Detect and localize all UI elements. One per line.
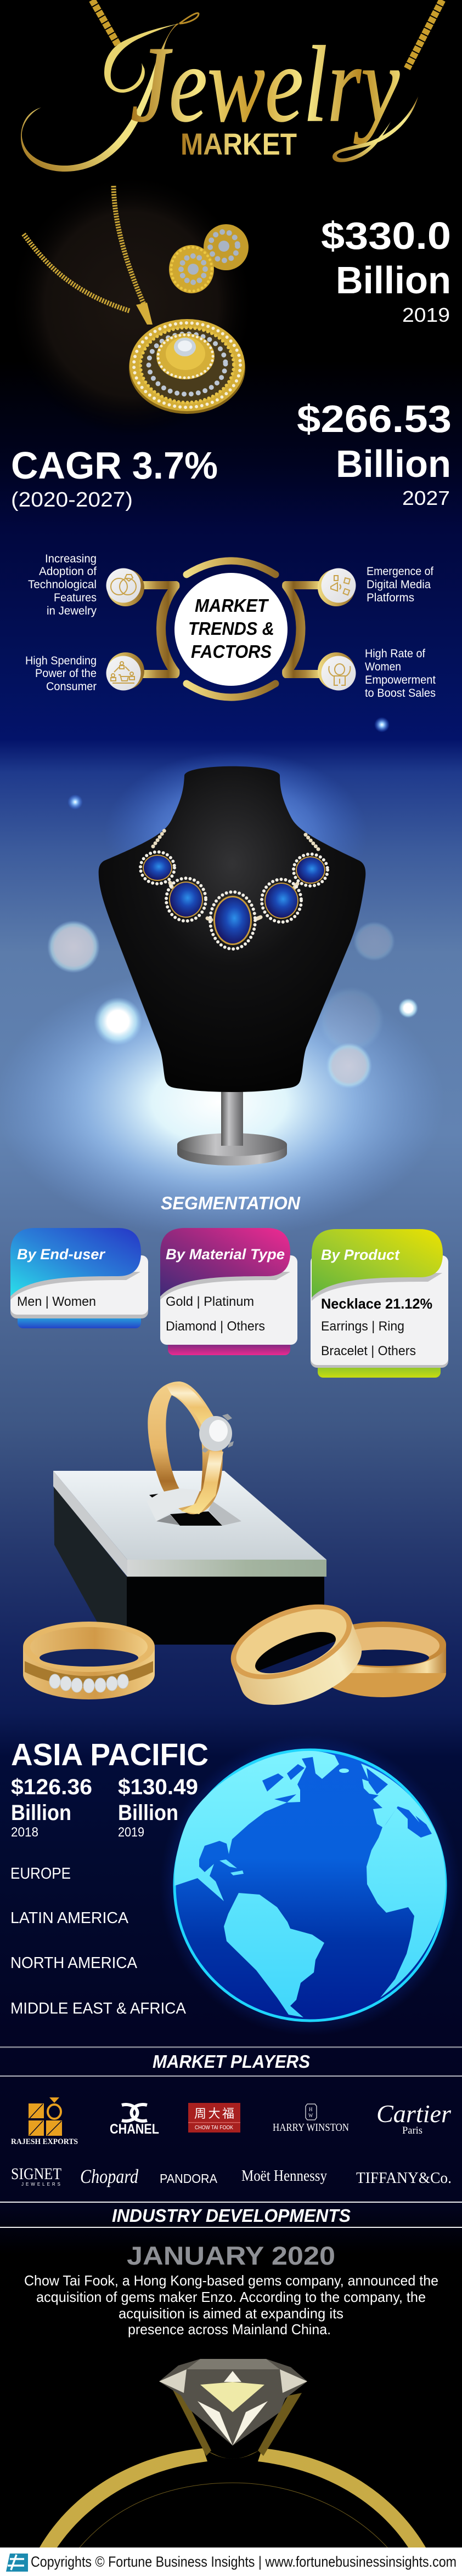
globe: [159, 1735, 461, 2036]
card: by end-user: By End-user: [17, 1246, 105, 1263]
card: by end-user: [10, 1228, 148, 1328]
bust body: [99, 766, 365, 1092]
lid front: [127, 1560, 326, 1577]
illustration: bust with sapphire necklace: [99, 766, 365, 1165]
logo: Chopard: Chopard: [80, 2165, 139, 2187]
europe and africa: [361, 1764, 446, 1998]
logo: Rajesh Exports: [11, 2097, 78, 2146]
stat: $330.0 Billion 2019: 2019: [402, 304, 450, 326]
logo: Tiffany: TIFFANY&Co.: [356, 2170, 452, 2187]
logo: Harry Winston: H: [309, 2107, 313, 2112]
ring slot: [149, 1493, 241, 1526]
card: by product: Earrings | Ring: [321, 1319, 404, 1334]
illustration: ring on display box: [53, 1381, 326, 1645]
card: by end-user: Men | Women: [17, 1294, 96, 1309]
front ring: [221, 1589, 372, 1720]
logo: Harry Winston: HARRY WINSTON: [273, 2122, 349, 2134]
pendant: [129, 319, 245, 414]
subtitle MARKET: MARKET: [181, 127, 297, 161]
script J stem swash: [21, 24, 179, 172]
title: Jewelry Market: [21, 0, 442, 172]
logo: Pandora: PANDORA: [160, 2171, 218, 2186]
list: other regions: EUROPE: [10, 1865, 71, 1883]
label: women empowerment: Women: [365, 661, 401, 673]
label: technological features: Technological: [28, 578, 97, 591]
illustration: pair of gold rings: [221, 1589, 446, 1720]
north america: [174, 1751, 339, 1901]
gem: [262, 879, 301, 922]
earring front: [169, 245, 214, 293]
top arc: [187, 561, 275, 575]
stat: $330.0 Billion 2019: [321, 214, 451, 326]
label: women empowerment: High Rate of: [365, 647, 425, 660]
stat: $266.53 Billion 2027: 2027: [402, 487, 450, 509]
label: digital media: Emergence of: [367, 565, 433, 578]
list: other regions: LATIN AMERICA: [10, 1909, 129, 1927]
panel: asia pacific regional stats: Billion: [11, 1801, 71, 1825]
logo: Chow Tai Fook: CHOW TAI FOOK: [195, 2125, 233, 2131]
script y tail swash: [333, 96, 418, 162]
logo: Rajesh Exports: RAJESH EXPORTS: [11, 2137, 78, 2146]
logo: Chanel: CHANEL: [110, 2122, 159, 2137]
baltic and mediterranean seas: [367, 1768, 432, 1838]
ring front band: [181, 1451, 223, 1514]
footer: [0, 2547, 462, 2576]
stat: $330.0 Billion 2019: $330.0: [321, 214, 451, 257]
right bracket: [282, 581, 320, 678]
list: other regions: [10, 1865, 187, 2017]
south america: [224, 1893, 324, 2017]
logo: Signet: JEWELERS: [21, 2182, 60, 2187]
card: by product: [311, 1229, 448, 1378]
centre title: FACTORS: [191, 641, 272, 662]
logo: Cartier: Cartier: [376, 2100, 452, 2128]
label: spending power: Consumer: [46, 680, 97, 693]
list: other regions: NORTH AMERICA: [10, 1954, 138, 1972]
heading: segmentation: SEGMENTATION: [161, 1193, 301, 1213]
heading: market players: MARKET PLAYERS: [153, 2051, 310, 2072]
panel: asia pacific regional stats: ASIA PACIFIC: [11, 1737, 209, 1772]
label: digital media: Digital Media: [367, 578, 431, 591]
stand pole: [221, 1088, 243, 1146]
logo: Fortune Business Insights: [6, 2554, 28, 2572]
panel: asia pacific regional stats: $126.36: [11, 1775, 92, 1799]
hudson bay: [262, 1764, 305, 1802]
bottom arc: [187, 684, 275, 697]
card: by material type: Gold | Platinum: [166, 1294, 254, 1309]
panel: asia pacific regional stats: $130.49: [118, 1775, 198, 1799]
photo: gold pendant necklace and earrings: [8, 173, 255, 436]
label: technological features: Adoption of: [39, 565, 97, 578]
ring band: [148, 1381, 223, 1514]
label: women empowerment: Empowerment: [365, 674, 436, 686]
panel: market trends and factors: [25, 553, 436, 700]
card: by product: Necklace 21.12%: [321, 1295, 432, 1312]
gem: [166, 878, 206, 921]
heading: industry developments: INDUSTRY DEVELOPMENTS: [112, 2205, 351, 2226]
iceland: [339, 1768, 349, 1773]
panel: asia pacific regional stats: Billion: [118, 1801, 178, 1825]
stat: $266.53 Billion 2027: [297, 397, 452, 509]
card: by material type: Diamond | Others: [166, 1319, 265, 1334]
label: technological features: Features: [54, 592, 97, 604]
white cushion arch: [147, 1488, 200, 1521]
stat: CAGR: [11, 444, 218, 511]
panel: asia pacific regional stats: 2018: [11, 1825, 38, 1840]
diamond: [159, 2359, 307, 2446]
ring band: [40, 2448, 207, 2547]
label: digital media: Platforms: [367, 592, 414, 604]
word Jewelry: Jewelry: [131, 24, 399, 144]
box left side: [54, 1486, 127, 1645]
card: by material type: By Material Type: [166, 1246, 285, 1263]
logo: Harry Winston: [273, 2104, 349, 2134]
caribbean islands: [219, 1860, 244, 1875]
logo: Chow Tai Fook: 周大福: [194, 2107, 234, 2120]
text block: Chow Tai Fook acquisition: Chow Tai Fook, a Hong Kong-based gems company, announced the: [24, 2272, 438, 2289]
illustration: diamond band ring: [23, 1622, 155, 1699]
rear ring: [320, 1622, 446, 1697]
text block: Chow Tai Fook acquisition: acquisition of gems maker Enzo. According to the company, the: [36, 2289, 426, 2305]
logo: Chow Tai Fook: [188, 2103, 240, 2133]
stat: CAGR: (2020-2027): [11, 488, 133, 511]
label: technological features: in Jewelry: [47, 605, 97, 617]
logo: Harry Winston: W: [308, 2113, 313, 2118]
lid left side: [53, 1471, 127, 1577]
stat: $330.0 Billion 2019: Billion: [336, 259, 451, 302]
stat: CAGR: CAGR 3.7%: [11, 444, 218, 487]
box front: [127, 1577, 324, 1645]
icon: gold chain left: [92, 0, 118, 45]
icon: wedding rings: [106, 568, 144, 606]
label: spending power: High Spending: [25, 655, 97, 667]
text block: Chow Tai Fook acquisition: presence across Mainland China.: [128, 2321, 331, 2338]
stat: $266.53 Billion 2027: $266.53: [297, 397, 452, 440]
centre gem: [210, 892, 255, 949]
necklace: [140, 829, 328, 949]
heading: January 2020: JANUARY 2020: [127, 2241, 335, 2270]
chain strands: [114, 186, 144, 305]
illustration: diamond ring: [40, 2359, 426, 2547]
gem: [140, 852, 174, 884]
prongs: [171, 2386, 302, 2456]
left bracket: [142, 581, 179, 678]
text block: Chow Tai Fook acquisition: acquisition is aimed at expanding its: [119, 2305, 343, 2322]
script J top hook: [104, 24, 179, 93]
lid top: [53, 1471, 326, 1560]
logo: Chanel: [110, 2105, 159, 2137]
label: women empowerment: to Boost Sales: [365, 687, 436, 700]
label: technological features: Increasing: [45, 553, 97, 565]
card: by material type: [160, 1228, 297, 1355]
panel: asia pacific regional stats: [11, 1737, 209, 1840]
icon: gold chain right: [407, 0, 442, 69]
centre title: MARKET: [195, 595, 269, 616]
icon: digital media: [318, 568, 356, 606]
stand base: [177, 1133, 287, 1165]
earring back: [204, 224, 249, 270]
background glow and bokeh lights: [0, 717, 444, 1239]
icon: women empowerment: [318, 652, 356, 691]
centre circle: [174, 573, 288, 686]
diamonds row: [49, 1674, 128, 1693]
centre title: TRENDS &: [188, 618, 274, 639]
logo: Signet: SIGNET: [11, 2165, 61, 2183]
logo: Cartier: Paris: [402, 2125, 422, 2136]
panel: asia pacific regional stats: 2019: [118, 1825, 144, 1840]
card: by product: Bracelet | Others: [321, 1344, 416, 1358]
logo: Moet Hennessy: Moët Hennessy: [241, 2168, 327, 2185]
ring diamond: [199, 1414, 234, 1453]
ring top highlight: [166, 1384, 214, 1431]
icon: consumer spending: [106, 652, 144, 691]
stat: $266.53 Billion 2027: Billion: [336, 442, 451, 485]
label: spending power: Power of the: [35, 667, 97, 680]
gem: [294, 854, 328, 886]
list: other regions: MIDDLE EAST & AFRICA: [10, 2000, 187, 2017]
script J loop: [179, 13, 199, 24]
card: by product: By Product: [321, 1247, 400, 1263]
